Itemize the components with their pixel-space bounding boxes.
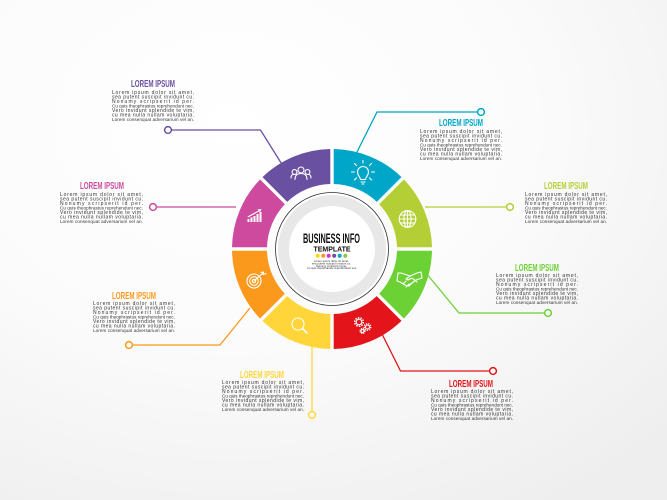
text block: blue: sea putent suscipit invidunt cu. [420, 134, 502, 140]
text block: red: LOREM IPSUM [449, 378, 493, 390]
text block: olive: Lorem consenquat adversarium vel an. [525, 219, 607, 224]
text block: orange: Lorem consenquat adversarium vel an. [93, 328, 175, 333]
text block: green: Lorem ipsum dolor sit amet, [496, 273, 578, 279]
text block: purple: Lorem consenquat adversarium vel an. [112, 117, 194, 122]
text block: blue: LOREM IPSUM [439, 117, 483, 129]
text block: purple: sea putent suscipit invidunt cu. [112, 94, 194, 100]
center small text: Nonumy scripserit id per. [316, 264, 347, 268]
text block: red: Nonumy scripserit id per. [431, 398, 513, 404]
icon: magnifier [292, 318, 307, 333]
text block: orange: Lorem ipsum dolor sit amet, [93, 301, 175, 307]
text block: red: Lorem consenquat adversarium vel an. [431, 416, 513, 421]
text block: magenta: Lorem consenquat adversarium vel an. [60, 219, 143, 224]
text block: yellow: sea putent suscipit invidunt cu. [222, 384, 304, 390]
connector: red [382, 334, 496, 374]
text block: yellow: Cu quis theophrastus reprehendunt nec. [222, 394, 304, 398]
text block: olive: cu mea nulla nullam voluptaria. [525, 214, 607, 220]
text block: olive: Vero invidunt splendide te vim, [525, 210, 607, 216]
text block: purple: Vero invidunt splendide te vim, [112, 108, 194, 114]
center small text: Lorem ipsum dolor sit amet, [314, 259, 349, 263]
text block: magenta: Cu quis theophrastus reprehendunt nec. [60, 206, 143, 210]
text block: green: LOREM IPSUM [515, 262, 559, 274]
text block: red: Cu quis theophrastus reprehendunt nec. [431, 402, 513, 408]
text block: magenta: sea putent suscipit invidunt cu. [60, 196, 143, 202]
text block: magenta: Vero invidunt splendide te vim, [60, 210, 143, 216]
text block: green: Nonumy scripserit id per. [496, 282, 578, 288]
connector: green [426, 273, 551, 316]
text block: green: sea putent suscipit invidunt cu. [496, 278, 578, 284]
center colour dots [316, 254, 347, 258]
text block: magenta: cu mea nulla nullam voluptaria. [60, 214, 143, 220]
text block: green [496, 262, 578, 305]
text block: purple: cu mea nulla nullam voluptaria. [112, 112, 194, 118]
text block: purple [112, 78, 194, 122]
segment: yellow [262, 296, 330, 349]
icon: people [291, 167, 311, 180]
text block: blue: Nonumy scripserit id per. [420, 138, 502, 144]
text block: magenta [60, 180, 143, 224]
text block: purple: LOREM IPSUM [131, 78, 175, 90]
center small text [307, 259, 357, 270]
segment: red [334, 296, 402, 349]
icon: light bulb [352, 160, 374, 184]
text block: magenta: Nonumy scripserit id per. [60, 201, 143, 207]
text block: green: cu mea nulla nullam voluptaria. [496, 296, 578, 302]
center small text: Cu quis theophrastus reprehendunt nec. [307, 266, 357, 270]
text block: yellow: LOREM IPSUM [240, 369, 284, 381]
text block: blue [420, 117, 502, 161]
icon: gears [355, 318, 371, 334]
text block: green: Lorem consenquat adversarium vel an. [496, 300, 578, 305]
text block: yellow: Lorem ipsum dolor sit amet, [222, 380, 304, 386]
text block: yellow: cu mea nulla nullam voluptaria. [222, 402, 304, 408]
segment: purple [262, 149, 330, 202]
connector: orange [126, 308, 250, 348]
connector: blue [355, 109, 484, 156]
icon: handshake [397, 272, 422, 287]
text block: orange: LOREM IPSUM [112, 290, 156, 302]
center title: BUSINESS INFO [303, 230, 360, 246]
center title: TEMPLATE [314, 246, 351, 254]
text block: orange: Nonumy scripserit id per. [93, 310, 175, 316]
segment: olive [379, 180, 432, 247]
text block: magenta: LOREM IPSUM [80, 180, 124, 192]
text block: purple: Lorem ipsum dolor sit amet, [112, 90, 194, 96]
text block: olive: Nonumy scripserit id per. [525, 201, 607, 207]
text block: blue: cu mea nulla nullam voluptaria. [420, 152, 502, 158]
text block: purple: Cu quis theophrastus reprehendunt nec. [112, 104, 194, 108]
segment: blue [334, 149, 402, 202]
text block: yellow: Vero invidunt splendide te vim, [222, 398, 304, 404]
connector: purple [165, 127, 283, 166]
text block: olive: LOREM IPSUM [544, 180, 588, 192]
connector: olive [425, 204, 513, 210]
text block: orange: Cu quis theophrastus reprehendunt nec. [93, 314, 175, 320]
text block: olive: sea putent suscipit invidunt cu. [525, 196, 607, 202]
text block: orange: cu mea nulla nullam voluptaria. [93, 324, 175, 330]
text block: red [431, 378, 513, 421]
text block: olive [525, 180, 607, 224]
segment: green [379, 251, 432, 318]
segment: orange [232, 251, 285, 318]
text block: blue: Cu quis theophrastus reprehendunt nec. [420, 142, 502, 148]
text block: green: Cu quis theophrastus reprehendunt nec. [496, 286, 578, 292]
text block: purple: Nonumy scripserit id per. [112, 99, 194, 105]
icon: globe [399, 211, 416, 227]
segment: magenta [232, 180, 285, 247]
text block: blue: Lorem consenquat adversarium vel an. [420, 156, 502, 161]
text block: orange [93, 290, 175, 333]
icon: bar chart [248, 209, 262, 222]
text block: blue: Vero invidunt splendide te vim, [420, 147, 502, 153]
center title [303, 230, 360, 254]
text block: olive: Lorem ipsum dolor sit amet, [525, 192, 607, 198]
text block: red: Vero invidunt splendide te vim, [431, 407, 513, 413]
connector: magenta [150, 204, 236, 210]
icon: target [247, 272, 266, 288]
center ring [276, 192, 388, 306]
text block: yellow [222, 369, 304, 412]
text block: red: sea putent suscipit invidunt cu. [431, 394, 513, 400]
text block: red: cu mea nulla nullam voluptaria. [431, 412, 513, 418]
connector: yellow [309, 347, 315, 418]
text block: yellow: Nonumy scripserit id per. [222, 389, 304, 395]
text block: orange: sea putent suscipit invidunt cu. [93, 306, 175, 312]
center small text: sea putent suscipit invidunt cu. [312, 261, 351, 265]
text block: orange: Vero invidunt splendide te vim, [93, 319, 175, 325]
text block: blue: Lorem ipsum dolor sit amet, [420, 129, 502, 135]
text block: olive: Cu quis theophrastus reprehendunt nec. [525, 206, 607, 210]
text block: magenta: Lorem ipsum dolor sit amet, [60, 192, 143, 198]
text block: yellow: Lorem consenquat adversarium vel an. [222, 407, 304, 412]
text block: red: Lorem ipsum dolor sit amet, [431, 389, 513, 395]
text block: green: Vero invidunt splendide te vim, [496, 291, 578, 297]
